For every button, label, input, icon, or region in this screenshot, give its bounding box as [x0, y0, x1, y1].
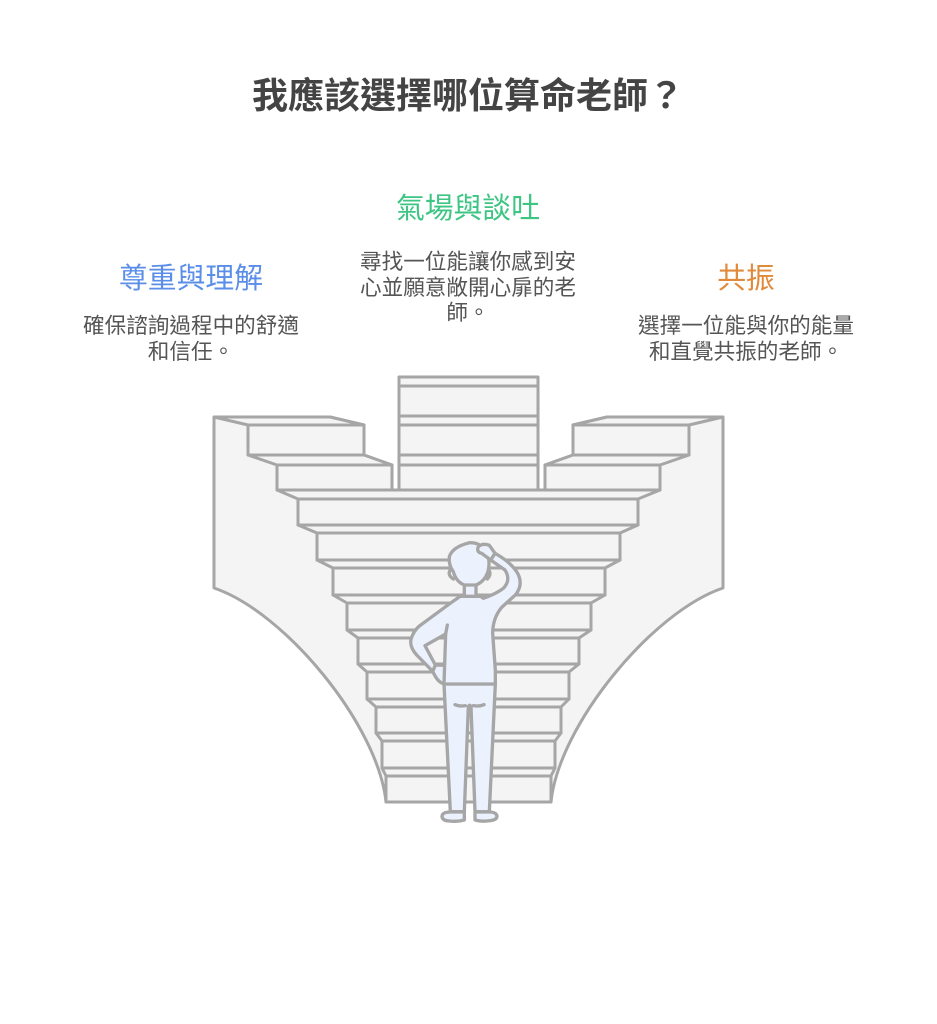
ears: [449, 568, 490, 579]
shoes: [442, 812, 497, 821]
person scratching head, seen from behind: [411, 543, 520, 821]
torso and arms: [411, 553, 520, 684]
text: aura and speech: 尋找一位能讓你感到安: [360, 249, 576, 274]
title: 我應該選擇哪位算命老師？: [252, 75, 684, 116]
text: respect and understanding: 確保諮詢過程中的舒適: [83, 313, 299, 338]
heading: resonance: 共振: [717, 263, 775, 295]
stair silhouette with curved sides: [214, 417, 723, 802]
text: respect and understanding: 和信任。: [148, 339, 234, 364]
legs: [444, 684, 495, 812]
text: aura and speech: [360, 249, 576, 325]
text: resonance: 選擇一位能與你的能量: [638, 313, 854, 338]
central tower: [399, 377, 538, 490]
neck: [464, 583, 476, 597]
text: aura and speech: 師。: [446, 300, 490, 325]
text: respect and understanding: [83, 313, 299, 364]
text: resonance: [638, 313, 854, 364]
central descending steps: [277, 490, 660, 802]
head: [449, 543, 489, 585]
torso edge: [446, 625, 447, 634]
pocket line: [455, 705, 484, 706]
text: aura and speech: 心並願意敞開心扉的老: [360, 275, 576, 300]
heading: respect and understanding: 尊重與理解: [119, 263, 263, 295]
hand on head: [478, 544, 495, 560]
left upper steps: [214, 417, 392, 490]
text: resonance: 和直覺共振的老師。: [649, 339, 843, 364]
right upper steps: [545, 417, 723, 490]
hand on hip: [433, 665, 445, 684]
heading: aura and speech: 氣場與談吐: [396, 193, 540, 225]
